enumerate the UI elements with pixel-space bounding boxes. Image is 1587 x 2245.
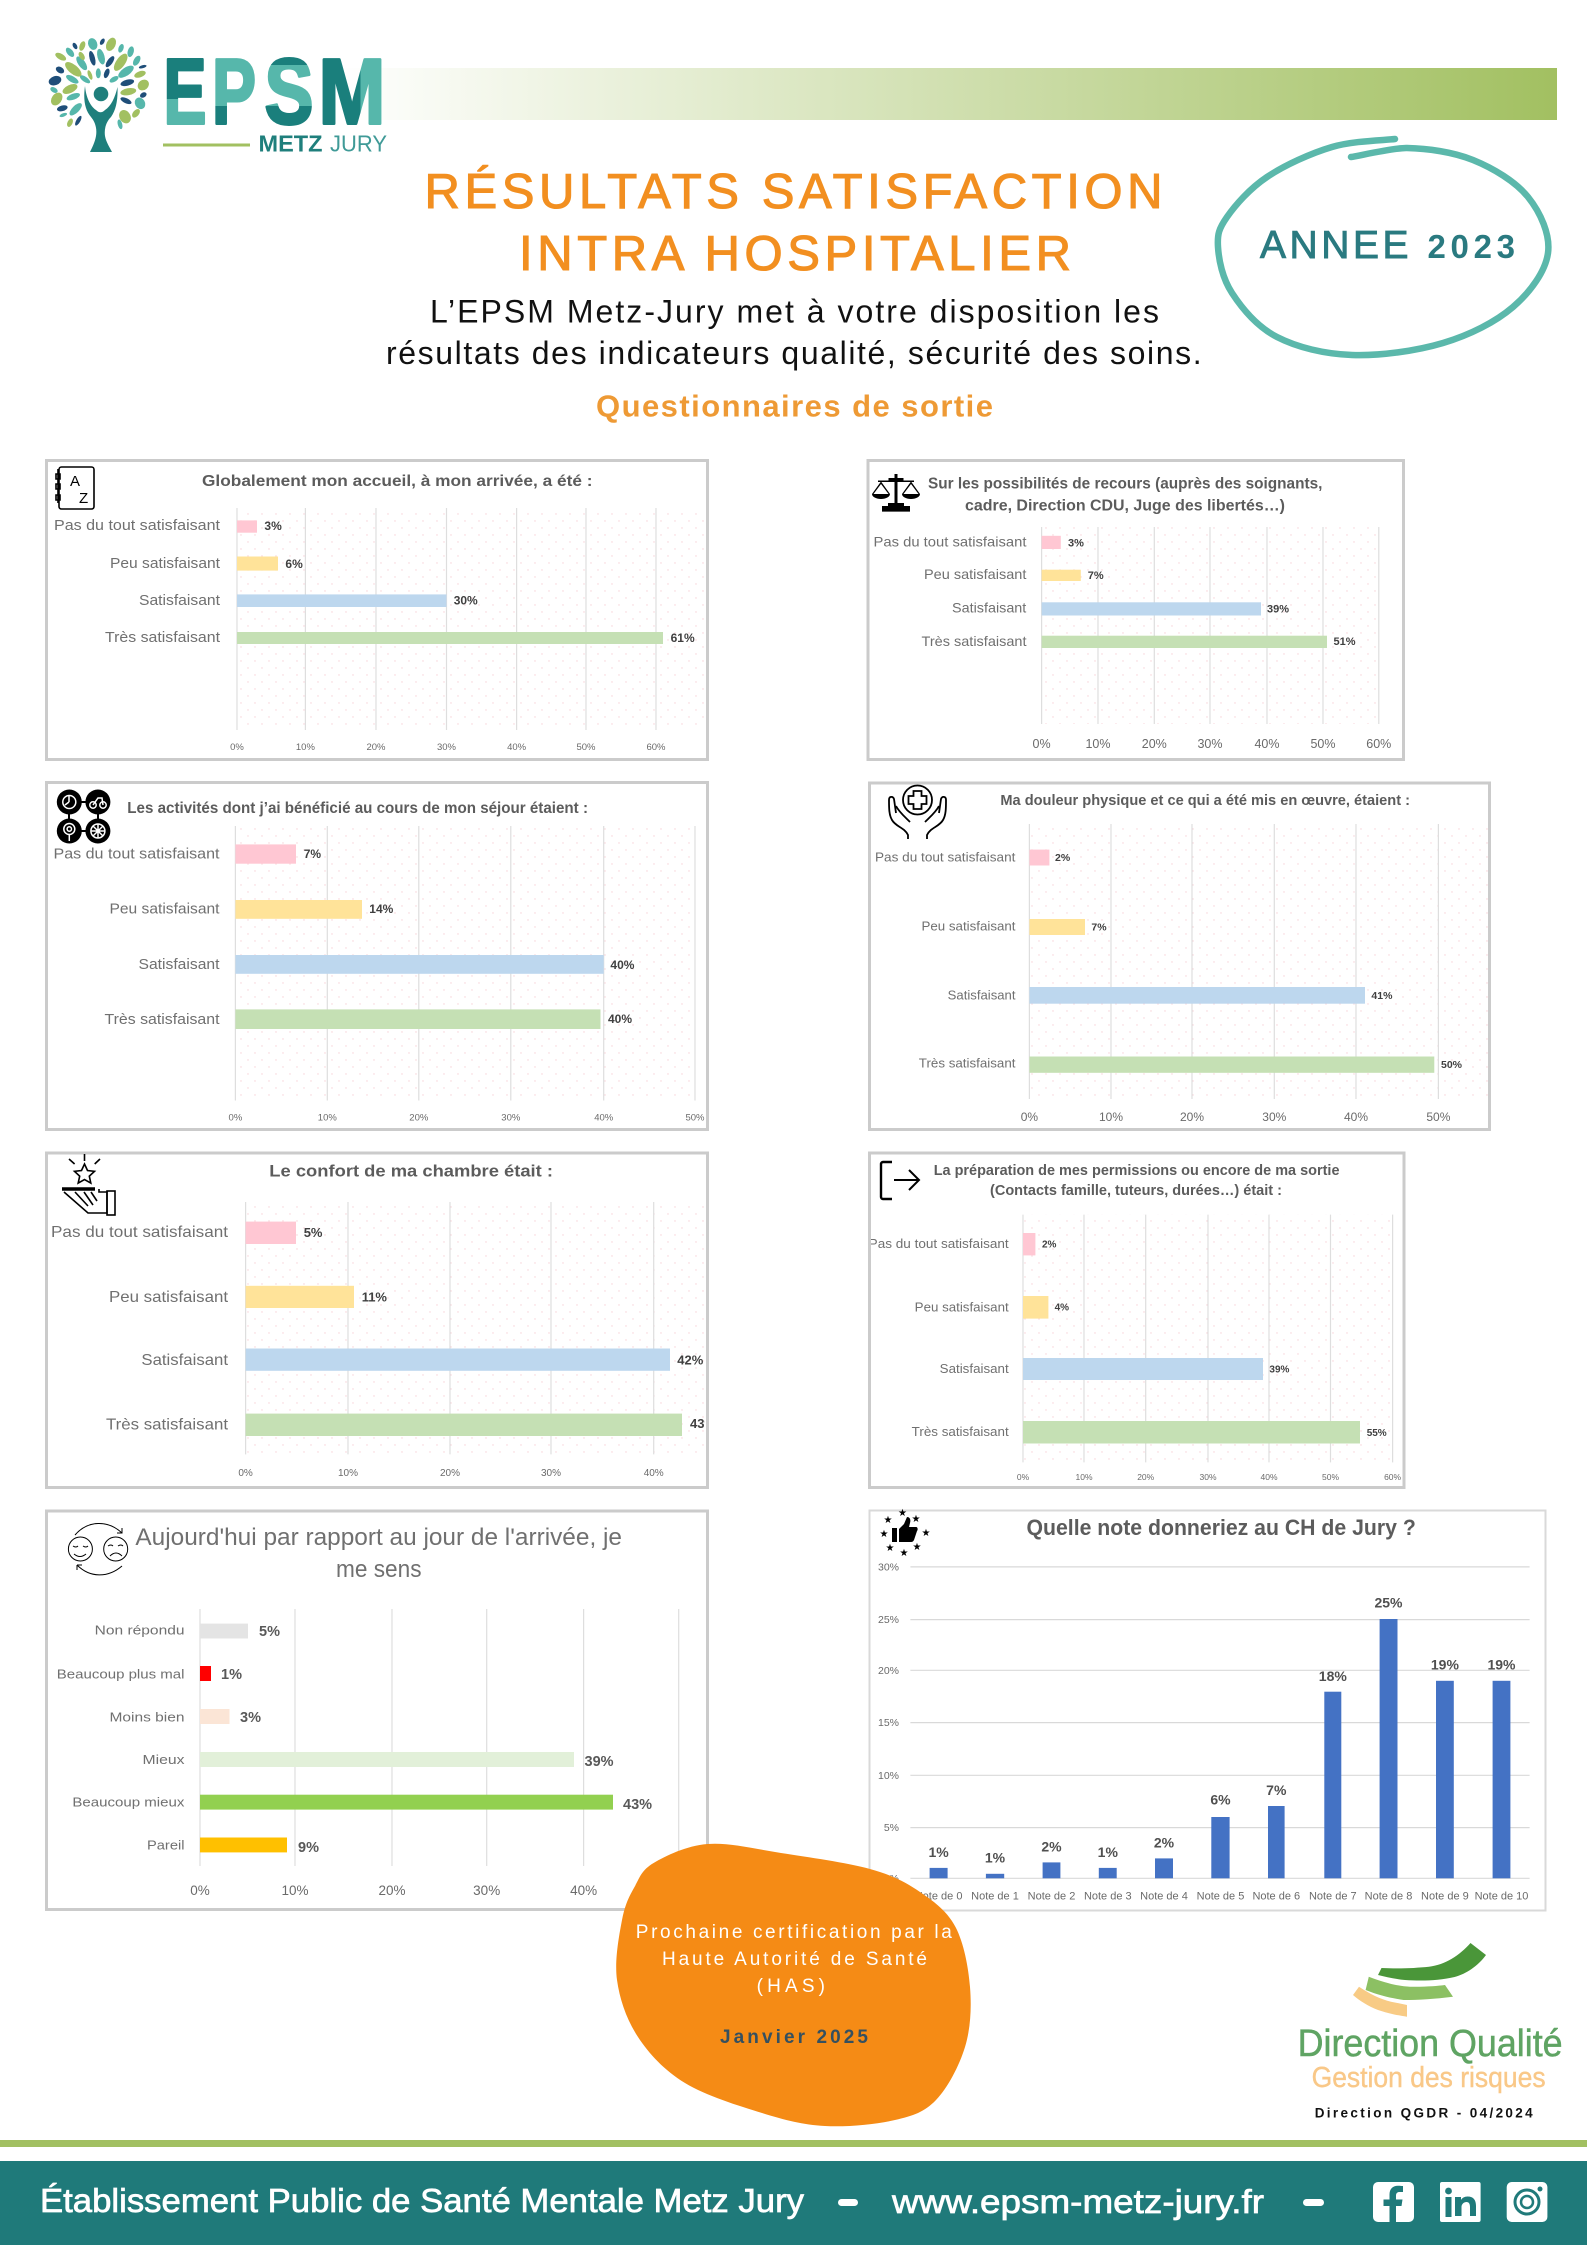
callout: prochaine certification: (HAS) bbox=[757, 1976, 825, 1997]
panel: accueil bbox=[46, 460, 708, 760]
heading: cadre, Direction CDU, Juge des libertés…) bbox=[965, 498, 1285, 514]
column chart: Note de 10 bbox=[1475, 1890, 1528, 1902]
bar chart: Satisfaisant bbox=[948, 988, 1016, 1003]
bar chart: Satisfaisant bbox=[138, 956, 220, 973]
column chart: Note de 2 bbox=[1028, 1890, 1075, 1902]
bar chart: Pas du tout satisfaisant bbox=[874, 534, 1027, 550]
bar chart bbox=[869, 1215, 1402, 1482]
icon: facebook bbox=[1373, 2182, 1414, 2222]
bar chart: 50% bbox=[576, 742, 596, 753]
heading: Le confort de ma chambre était : bbox=[269, 1162, 553, 1180]
logo: Direction Qualité: Gestion des risques bbox=[1312, 2062, 1546, 2094]
bar chart: Pas du tout satisfaisant bbox=[54, 517, 221, 534]
footer rule bbox=[0, 2140, 1587, 2147]
bar chart: Très satisfaisant bbox=[919, 1056, 1016, 1071]
bar chart bbox=[874, 527, 1391, 751]
icon: instagram bbox=[1507, 2182, 1547, 2222]
icon: hands holding medical cross bbox=[889, 786, 946, 839]
footer band bbox=[0, 2161, 1587, 2245]
bar chart: Très satisfaisant bbox=[922, 633, 1027, 649]
bar chart: Peu satisfaisant bbox=[110, 900, 220, 917]
icon: thumb up in stars: ★ bbox=[884, 1515, 893, 1526]
wordmark EPSM: E bbox=[164, 40, 206, 144]
bar chart: Pareil bbox=[147, 1838, 185, 1853]
wordmark EPSM: S bbox=[264, 40, 314, 144]
icon: thumb up in stars bbox=[880, 1508, 931, 1559]
footer: website: www.epsm-metz-jury.fr bbox=[891, 2183, 1264, 2220]
column chart: 5% bbox=[884, 1822, 899, 1834]
bar chart: 20% bbox=[1180, 1110, 1204, 1124]
bar chart: 61% bbox=[671, 631, 695, 645]
bar chart: Pas du tout satisfaisant bbox=[875, 849, 1016, 864]
bar chart: 41% bbox=[1371, 990, 1393, 1002]
logo: Direction Qualité bbox=[1298, 1943, 1563, 2094]
title: INTRA HOSPITALIER bbox=[519, 227, 1071, 281]
column chart: Note de 1 bbox=[971, 1890, 1019, 1902]
header gradient bar bbox=[340, 68, 1557, 120]
column chart: 0% bbox=[884, 1873, 899, 1885]
footer: organisation name: Établissement Public de Santé Mentale Metz Jury bbox=[40, 2182, 805, 2219]
heading: Les activités dont j’ai bénéficié au cours de mon séjour étaient : bbox=[127, 800, 588, 817]
panel: confort bbox=[46, 1153, 716, 1488]
bar chart: 50% bbox=[685, 1112, 705, 1123]
bar chart: 39% bbox=[1269, 1365, 1290, 1376]
panel: ressenti par rapport à l'arrivée bbox=[46, 1511, 708, 1910]
heading bbox=[135, 1524, 622, 1583]
heading: me sens bbox=[336, 1556, 422, 1583]
bar chart: 40% bbox=[608, 1012, 632, 1026]
bar chart: 3% bbox=[240, 1710, 261, 1726]
heading bbox=[934, 1163, 1340, 1199]
bar chart: 10% bbox=[1099, 1110, 1123, 1124]
icon: scales of justice bbox=[872, 474, 920, 512]
bar chart bbox=[54, 826, 705, 1123]
column chart: Note de 6 bbox=[1252, 1890, 1300, 1902]
bar chart: Moins bien bbox=[110, 1709, 184, 1724]
column chart: 15% bbox=[878, 1717, 899, 1729]
title: RÉSULTATS SATISFACTION bbox=[424, 165, 1162, 219]
bar chart: 51% bbox=[1334, 636, 1356, 648]
column chart bbox=[878, 1562, 1530, 1902]
bar chart: Pas du tout satisfaisant bbox=[51, 1224, 229, 1241]
bar chart bbox=[54, 508, 705, 753]
icon: thumb up in stars: ★ bbox=[886, 1543, 895, 1554]
bar chart: 39% bbox=[584, 1754, 614, 1770]
bar chart: Peu satisfaisant bbox=[109, 1289, 229, 1306]
bar chart: 4% bbox=[1055, 1302, 1069, 1313]
column chart: Note de 8 bbox=[1365, 1890, 1412, 1902]
bar chart: Peu satisfaisant bbox=[110, 555, 221, 572]
column chart: 2% bbox=[1154, 1834, 1175, 1850]
bar chart: Peu satisfaisant bbox=[924, 566, 1027, 582]
bar chart: 40% bbox=[1344, 1110, 1368, 1124]
bar chart: 30% bbox=[454, 593, 478, 607]
bar chart: 40% bbox=[1260, 1472, 1278, 1482]
logo: EPSM Metz Jury bbox=[47, 36, 387, 156]
bar chart: Non répondu bbox=[95, 1622, 184, 1637]
column chart: Note de 4 bbox=[1140, 1890, 1188, 1902]
bar chart: Satisfaisant bbox=[139, 592, 221, 609]
heading: Sur les possibilités de recours (auprès des soignants, bbox=[928, 476, 1322, 492]
callout: prochaine certification bbox=[616, 1844, 971, 2126]
bar chart: 3% bbox=[264, 519, 282, 533]
bar chart: 50% bbox=[1322, 1472, 1339, 1482]
icon: swooshes bbox=[1353, 1943, 1486, 2017]
bar chart: 55% bbox=[1367, 1428, 1387, 1439]
bar chart: Satisfaisant bbox=[952, 600, 1026, 616]
bar chart: 30% bbox=[1199, 1472, 1217, 1482]
intro text: L’EPSM Metz-Jury met à votre disposition les bbox=[430, 294, 1159, 330]
panel: recours bbox=[868, 460, 1404, 760]
panel: note du CH de Jury bbox=[870, 1508, 1546, 1910]
bar chart: 10% bbox=[318, 1112, 337, 1123]
bar chart bbox=[51, 1202, 716, 1479]
icon: faces with cycle arrows bbox=[68, 1523, 128, 1575]
column chart: 19% bbox=[1487, 1656, 1516, 1672]
bar chart: 50% bbox=[1310, 737, 1336, 751]
column chart: 10% bbox=[878, 1770, 899, 1782]
icon: thumb up in stars: ★ bbox=[912, 1514, 921, 1525]
heading: Aujourd'hui par rapport au jour de l'arrivée, je bbox=[135, 1524, 622, 1551]
bar chart: 50% bbox=[1426, 1110, 1451, 1124]
wordmark Metz Jury bbox=[258, 130, 387, 156]
bar chart: Satisfaisant bbox=[940, 1361, 1009, 1376]
bar chart: 11% bbox=[362, 1290, 387, 1304]
column chart: 30% bbox=[878, 1562, 899, 1574]
bar chart: 20% bbox=[1142, 737, 1167, 751]
column chart: 1% bbox=[985, 1849, 1006, 1865]
bar chart: Mieux bbox=[142, 1752, 185, 1767]
wordmark Metz Jury: METZ bbox=[258, 130, 322, 156]
column chart: Note de 0 bbox=[915, 1890, 962, 1902]
column chart: 25% bbox=[878, 1614, 899, 1626]
bar chart: 2% bbox=[1042, 1240, 1057, 1251]
bar chart: 60% bbox=[1384, 1472, 1402, 1482]
icon: thumb up in stars: ★ bbox=[898, 1508, 907, 1519]
bar chart: 20% bbox=[366, 742, 386, 753]
bar chart: 20% bbox=[440, 1468, 460, 1479]
bar chart: 5% bbox=[304, 1225, 323, 1240]
subheading: Questionnaires de sortie bbox=[596, 388, 993, 424]
icon: exit arrow bbox=[881, 1162, 919, 1199]
bar chart: 7% bbox=[1091, 922, 1107, 934]
bar chart: 7% bbox=[304, 847, 321, 861]
heading bbox=[928, 476, 1322, 514]
bar chart: 40% bbox=[1254, 737, 1280, 751]
bar chart: Pas du tout satisfaisant bbox=[869, 1236, 1009, 1251]
bar chart: 2% bbox=[1055, 852, 1071, 864]
bar chart: 42% bbox=[677, 1352, 704, 1368]
panel: douleur bbox=[870, 783, 1490, 1130]
icon: tree of leaves bbox=[47, 36, 151, 152]
bar chart: 10% bbox=[296, 742, 315, 753]
bar chart: 9% bbox=[298, 1840, 319, 1856]
bar chart: 40% bbox=[610, 958, 635, 972]
logo: Direction Qualité: Direction Qualité bbox=[1298, 2023, 1563, 2065]
bar chart: 40% bbox=[594, 1112, 614, 1123]
bar chart: 30% bbox=[437, 742, 457, 753]
bar chart: 30% bbox=[541, 1468, 561, 1479]
column chart: 6% bbox=[1210, 1792, 1231, 1808]
heading: Globalement mon accueil, à mon arrivée, a été : bbox=[202, 473, 592, 490]
bar chart: 43% bbox=[623, 1797, 652, 1813]
column chart: Note de 9 bbox=[1421, 1890, 1469, 1902]
panel: activités bbox=[46, 782, 708, 1130]
bar chart: 40% bbox=[507, 742, 527, 753]
bar chart: 10% bbox=[338, 1468, 358, 1479]
column chart: 7% bbox=[1266, 1782, 1287, 1798]
figure and trunk bbox=[84, 86, 118, 152]
bar chart: 50% bbox=[1441, 1059, 1463, 1071]
bar chart: 60% bbox=[646, 742, 666, 753]
bar chart bbox=[875, 824, 1488, 1124]
bar chart: 40% bbox=[644, 1468, 664, 1479]
bar chart: Peu satisfaisant bbox=[922, 918, 1016, 934]
icon: thumb up in stars: ★ bbox=[900, 1548, 909, 1559]
column chart: 1% bbox=[928, 1844, 949, 1860]
icon: linkedin bbox=[1440, 2182, 1481, 2222]
bar chart: Très satisfaisant bbox=[106, 1416, 229, 1433]
credit: Direction QGDR: Direction QGDR - 04/2024 bbox=[1315, 2106, 1533, 2120]
bar chart: 0% bbox=[238, 1468, 253, 1479]
bar chart: Peu satisfaisant bbox=[915, 1299, 1009, 1314]
column chart: 25% bbox=[1374, 1595, 1403, 1611]
icon: thumb up in stars: ★ bbox=[880, 1529, 889, 1540]
icon: address book A-Z: A bbox=[70, 473, 80, 490]
icon: thumb up in stars: ★ bbox=[922, 1528, 931, 1539]
bar chart: Pas du tout satisfaisant bbox=[54, 845, 220, 862]
bar chart: 0% bbox=[229, 1112, 243, 1123]
intro text: résultats des indicateurs qualité, sécurité des soins. bbox=[386, 335, 1202, 371]
bar chart: Très satisfaisant bbox=[912, 1424, 1009, 1439]
bar chart: 10% bbox=[1075, 1472, 1093, 1482]
bar chart: 3% bbox=[1068, 537, 1084, 549]
icon: star over serving hand bbox=[62, 1154, 115, 1215]
badge: année 2023: 2023 bbox=[1428, 228, 1515, 265]
bar chart: 30% bbox=[473, 1883, 500, 1898]
icon: thumb up in stars: ★ bbox=[913, 1542, 922, 1553]
bar chart: 14% bbox=[369, 902, 394, 916]
bar chart bbox=[57, 1609, 679, 1898]
bar chart: 60% bbox=[1366, 737, 1391, 751]
bar chart: Très satisfaisant bbox=[104, 1011, 220, 1028]
callout: prochaine certification: Janvier 2025 bbox=[720, 2027, 868, 2048]
wordmark EPSM: P bbox=[212, 40, 256, 144]
intro text bbox=[386, 294, 1202, 371]
callout: prochaine certification: Haute Autorité de Santé bbox=[662, 1949, 927, 1970]
bar chart: Beaucoup plus mal bbox=[57, 1667, 185, 1682]
bar chart: 6% bbox=[285, 557, 303, 571]
column chart: Note de 3 bbox=[1084, 1890, 1132, 1902]
heading: La préparation de mes permissions ou encore de ma sortie bbox=[934, 1163, 1340, 1179]
bar chart: 30% bbox=[501, 1112, 521, 1123]
bar chart: 10% bbox=[281, 1883, 309, 1898]
callout: prochaine certification: Prochaine certification par la bbox=[636, 1922, 952, 1943]
bar chart: 0% bbox=[1021, 1110, 1038, 1124]
icon: activities bbox=[57, 790, 110, 844]
bar chart: 39% bbox=[1267, 604, 1289, 616]
bar chart: 0% bbox=[1033, 737, 1051, 751]
panel: préparation de la sortie bbox=[869, 1153, 1404, 1488]
bar chart: 5% bbox=[259, 1624, 280, 1640]
bar chart: 43% bbox=[690, 1416, 716, 1431]
heading: Quelle note donneriez au CH de Jury ? bbox=[1026, 1515, 1416, 1540]
bar chart: 40% bbox=[570, 1883, 597, 1898]
title bbox=[424, 165, 1162, 281]
column chart: Note de 7 bbox=[1309, 1890, 1357, 1902]
bar chart: 0% bbox=[230, 742, 244, 753]
wordmark Metz Jury: JURY bbox=[330, 130, 387, 156]
bar chart: Très satisfaisant bbox=[105, 629, 221, 646]
bar chart: 30% bbox=[1262, 1110, 1287, 1124]
bar chart: 10% bbox=[1085, 737, 1111, 751]
bar chart: 1% bbox=[221, 1667, 242, 1683]
icon: address book A-Z: Z bbox=[79, 490, 88, 507]
wordmark EPSM bbox=[164, 40, 386, 144]
column chart: Note de 5 bbox=[1197, 1890, 1244, 1902]
bar chart: 30% bbox=[1197, 737, 1223, 751]
bar chart: 20% bbox=[409, 1112, 429, 1123]
bar chart: 7% bbox=[1088, 570, 1104, 582]
badge: année 2023 bbox=[1218, 139, 1548, 355]
heading: (Contacts famille, tuteurs, durées…) était : bbox=[990, 1183, 1282, 1199]
bar chart: Beaucoup mieux bbox=[72, 1795, 185, 1810]
bar chart: Satisfaisant bbox=[141, 1352, 229, 1369]
column chart: 2% bbox=[1041, 1838, 1062, 1854]
icon: address book A-Z bbox=[56, 467, 94, 509]
badge: année 2023: ANNEE bbox=[1260, 224, 1408, 267]
column chart: 19% bbox=[1431, 1656, 1459, 1672]
column chart: 1% bbox=[1098, 1844, 1118, 1860]
heading: Ma douleur physique et ce qui a été mis en œuvre, étaient : bbox=[1000, 793, 1410, 809]
bar chart: 0% bbox=[1017, 1472, 1030, 1482]
column chart: 20% bbox=[878, 1665, 899, 1677]
wordmark EPSM: M bbox=[318, 40, 386, 144]
bar chart: 20% bbox=[378, 1883, 406, 1898]
bar chart: 20% bbox=[1137, 1472, 1155, 1482]
bar chart: 0% bbox=[190, 1883, 210, 1898]
column chart: 18% bbox=[1319, 1668, 1347, 1684]
